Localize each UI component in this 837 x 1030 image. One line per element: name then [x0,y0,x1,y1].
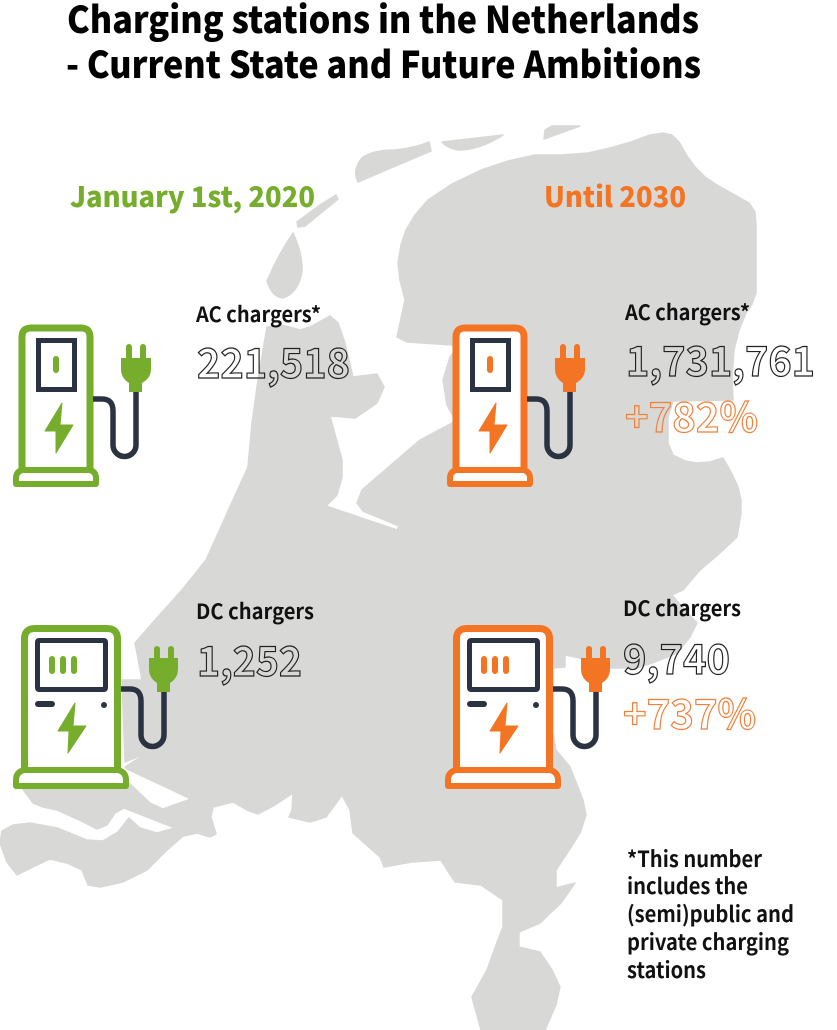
heading: Until 2030: Until 2030 [544,176,686,216]
footnote [627,842,794,985]
heading: January 1st, 2020: January 1st, 2020 [70,176,315,216]
footnote: (semi)public and [627,897,794,929]
footnote: *This number [627,842,762,874]
label: DC chargers (2020): DC chargers [196,596,314,626]
icon: green DC charger [16,628,178,786]
map: Texel island [267,233,302,298]
number: 221,518: 221,518 [197,330,350,390]
map: Vlieland island [297,195,338,227]
percentage: +737%: +737% [623,681,756,741]
title [66,0,701,89]
icon: orange DC charger [448,628,610,786]
map: Schiermonnikoog island [544,126,580,139]
footnote: stations [627,953,706,985]
percentage: +782%: +782% [625,384,758,444]
map of the Netherlands [0,126,756,1030]
label: DC chargers (2030): DC chargers [623,593,741,623]
map: Ameland island [442,135,503,150]
number: 9,740: 9,740 [623,626,730,686]
number: 1,252: 1,252 [197,628,302,688]
map: mainland [0,133,756,1030]
label: AC chargers (2020): AC chargers* [195,299,321,329]
title line 2: - Current State and Future Ambitions [66,35,701,89]
icon: green AC charger [16,328,151,484]
map: Terschelling island [356,142,431,182]
label: AC chargers (2030): AC chargers* [624,297,750,327]
number: 1,731,761: 1,731,761 [626,328,815,388]
icon: orange AC charger [450,328,585,484]
footnote: private charging [627,925,789,957]
footnote: includes the [627,869,748,901]
